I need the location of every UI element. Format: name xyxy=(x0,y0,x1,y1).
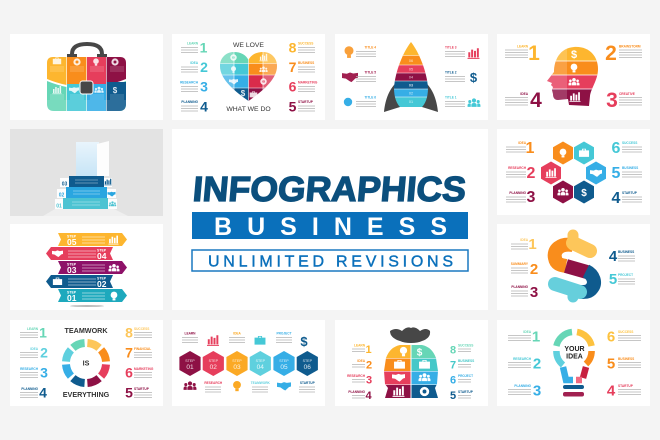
bag right labels: BUSINESS xyxy=(458,359,474,363)
timeline hexagons: STEP xyxy=(303,359,313,363)
step 05 arrow: STEP xyxy=(67,234,77,238)
rocket step numbers: 05 xyxy=(409,68,413,72)
right labels: SUCCESS xyxy=(298,42,313,46)
hexagon left labels: 2 xyxy=(527,165,536,182)
teamwork left labels xyxy=(20,324,48,400)
bulb right labels: 5 xyxy=(607,356,615,372)
rocket right labels: TITLE 3 xyxy=(445,46,457,50)
bag left labels xyxy=(347,344,372,402)
timeline hexagons: STEP xyxy=(279,359,289,363)
step 01 arrow: STEP xyxy=(67,290,77,294)
rocket step numbers: 06 xyxy=(409,59,413,63)
bulb right labels: 6 xyxy=(607,328,615,346)
left labels xyxy=(180,40,208,114)
head shape xyxy=(547,46,598,106)
rocket right labels: TITLE 1 xyxy=(445,96,457,100)
bag left labels: 2 xyxy=(366,360,372,372)
timeline hexagons: STEP xyxy=(185,359,195,363)
hexagon left labels: 3 xyxy=(527,189,536,206)
head labels: IDEA xyxy=(520,92,529,96)
briefcase top row xyxy=(47,57,126,111)
timeline hexagons: STEP xyxy=(256,359,266,363)
panel: light bulb: IDEA xyxy=(566,354,583,360)
timeline bottom row xyxy=(184,381,316,392)
rocket step numbers xyxy=(409,59,413,104)
hexagon left labels xyxy=(506,140,536,206)
bag right labels: 8 xyxy=(450,344,456,356)
bag left labels: 1 xyxy=(365,344,372,356)
rocket body xyxy=(394,42,428,107)
bag right labels: 5 xyxy=(450,390,456,402)
timeline bottom row: STARTUP xyxy=(300,381,316,385)
bulb left labels: RESEARCH xyxy=(513,357,532,361)
rocket right labels: $ xyxy=(470,70,478,85)
floor xyxy=(43,209,128,216)
timeline top row: PROJECT xyxy=(276,332,292,336)
rocket right labels xyxy=(445,46,480,107)
right labels xyxy=(289,40,318,114)
dollar left labels: PLANNING xyxy=(511,285,529,289)
heart chart xyxy=(220,50,278,102)
rocket left labels: TITLE 4 xyxy=(364,46,376,50)
dollar left labels: 1 xyxy=(528,236,537,253)
bulb left labels xyxy=(508,328,541,400)
bag right labels: STARTUP xyxy=(458,390,474,394)
bulb right labels: STARTUP xyxy=(618,384,634,388)
title: infographics: INFOGRAPHICS xyxy=(191,170,468,209)
dollar left labels: 2 xyxy=(530,261,538,278)
rocket left labels: TITLE 5 xyxy=(364,70,376,74)
step 01 arrow xyxy=(58,289,127,303)
stair side blocks: 01 xyxy=(56,204,62,210)
panel: money bag xyxy=(335,320,488,406)
bulb outline segments xyxy=(556,332,592,380)
step 03 arrow: 03 xyxy=(67,265,77,275)
bulb center text: YOUR xyxy=(564,346,585,353)
bag right labels xyxy=(450,344,474,402)
teamwork right labels: MARKETING xyxy=(134,367,154,371)
bag icons: $ xyxy=(417,348,423,358)
step 01 arrow: 01 xyxy=(67,293,77,303)
bulb right labels xyxy=(607,328,641,400)
dollar right labels: BUSINESS xyxy=(618,250,634,254)
dollar left labels xyxy=(511,236,538,301)
bulb right labels: 4 xyxy=(607,382,616,400)
rocket right labels: TITLE 2 xyxy=(445,70,457,74)
rocket step numbers: 01 xyxy=(409,100,413,104)
bag icons xyxy=(392,347,430,397)
banner: unlimited revisions: UNLIMITED REVISIONS xyxy=(208,254,453,270)
teamwork left labels: 3 xyxy=(40,364,48,380)
head labels: 2 xyxy=(605,42,617,65)
step 04 arrow: 04 xyxy=(97,251,107,261)
heading: what we do: WHAT WE DO xyxy=(226,106,271,113)
timeline hexagons: STEP xyxy=(232,359,242,363)
head labels: 4 xyxy=(530,89,542,112)
dollar left labels: IDEA xyxy=(520,238,529,242)
bag left labels: RESEARCH xyxy=(347,374,366,378)
timeline top row: IDEA xyxy=(233,332,242,336)
dollar right labels: 4 xyxy=(609,248,618,265)
bulb left labels: 2 xyxy=(533,356,541,372)
banner: business: BUSINESS xyxy=(214,213,447,241)
teamwork left labels: 1 xyxy=(39,324,47,340)
head labels: 1 xyxy=(528,42,540,65)
dollar left labels: 3 xyxy=(530,284,538,301)
teamwork right labels: 5 xyxy=(125,384,133,400)
panel: hexagon timeline xyxy=(172,320,325,406)
head labels: 3 xyxy=(606,89,618,112)
left labels: 4 xyxy=(200,98,208,114)
rocket left labels: TITLE 6 xyxy=(364,96,376,100)
step 03 arrow xyxy=(58,261,127,275)
head labels: LEARN xyxy=(517,44,529,48)
heading: everything: EVERYTHING xyxy=(63,390,110,399)
right labels: 5 xyxy=(289,98,297,114)
hexagon right labels: STARTUP xyxy=(622,191,638,195)
timeline hexagons: 05 xyxy=(280,364,288,371)
panel: hexagon cycle xyxy=(497,129,650,215)
timeline hexagons: 06 xyxy=(304,364,311,371)
timeline hexagons: STEP xyxy=(209,359,219,363)
teamwork left labels: 4 xyxy=(39,384,47,400)
bag neck xyxy=(390,327,430,343)
head labels: BRAINSTORM xyxy=(619,44,641,48)
heart icons xyxy=(229,54,268,98)
hexagon right labels xyxy=(612,140,642,207)
teamwork right labels: 6 xyxy=(125,364,133,380)
hexagon right labels: 4 xyxy=(612,190,621,207)
step 02 arrow: 02 xyxy=(97,279,107,289)
stair side blocks: 03 xyxy=(62,182,67,188)
left labels: 3 xyxy=(200,78,208,94)
teamwork right labels: SUCCESS xyxy=(134,327,149,331)
bulb right labels: BUSINESS xyxy=(618,357,634,361)
timeline top row: $ xyxy=(300,334,308,349)
briefcase handle xyxy=(67,44,107,57)
step 05 arrow xyxy=(58,233,127,247)
rocket left labels xyxy=(342,46,376,106)
left labels: RESEARCH xyxy=(180,80,199,84)
timeline top row: LEARN xyxy=(185,332,196,336)
heart icons: $ xyxy=(241,89,246,98)
bulb left labels: PLANNING xyxy=(514,384,532,388)
left labels: LEARN xyxy=(187,42,199,46)
panel: briefcase infographic xyxy=(10,34,163,120)
teamwork left labels: PLANNING xyxy=(21,387,39,391)
bag left labels: IDEA xyxy=(357,359,366,363)
teamwork right labels: 7 xyxy=(125,344,133,360)
head labels: CREATIVE xyxy=(619,92,635,96)
teamwork right labels: STARTUP xyxy=(134,387,150,391)
briefcase icons: $ xyxy=(113,86,118,95)
teamwork left labels: 2 xyxy=(40,344,48,360)
bag right labels: SUCCESS xyxy=(458,344,473,348)
bag body xyxy=(384,345,438,398)
head icons: $ xyxy=(571,49,577,61)
open door xyxy=(76,141,109,177)
rocket step numbers: 02 xyxy=(409,92,413,96)
panel: head infographic xyxy=(497,34,650,120)
right labels: 6 xyxy=(289,78,297,94)
ring center text: IS xyxy=(83,358,90,368)
step 04 arrow xyxy=(46,247,113,261)
timeline hexagons: 04 xyxy=(257,364,264,371)
head labels xyxy=(505,42,642,112)
ring chart xyxy=(66,343,106,383)
step 05 arrow: 05 xyxy=(67,237,77,247)
dollar left labels: SUMMIARY xyxy=(511,262,529,266)
hexagon left labels: IDEA xyxy=(518,141,527,145)
panel: central title xyxy=(172,129,488,310)
dollar sign puzzle xyxy=(555,235,594,297)
briefcase icons xyxy=(52,58,119,95)
teamwork left labels: LEARN xyxy=(27,327,39,331)
step 03 arrow: STEP xyxy=(67,262,77,266)
bulb left labels: 1 xyxy=(532,328,540,346)
timeline hexagons: 01 xyxy=(186,364,194,371)
panel: open door staircase xyxy=(10,129,163,216)
left labels: 1 xyxy=(200,40,208,56)
rocket step numbers: 03 xyxy=(409,84,413,88)
bag left labels: 3 xyxy=(366,374,372,386)
teamwork left labels: RESEARCH xyxy=(20,367,39,371)
dollar right labels xyxy=(609,248,635,288)
bag left labels: 4 xyxy=(365,390,372,402)
bag right labels: 7 xyxy=(450,360,456,372)
step 02 arrow xyxy=(46,275,113,289)
right labels: BUSINESS xyxy=(298,61,314,65)
head icons xyxy=(568,49,581,102)
teamwork right labels: FINANCIAL xyxy=(134,347,151,351)
panel: dollar puzzle xyxy=(497,224,650,310)
hexagon right labels: BUSINESS xyxy=(622,166,638,170)
hexagons: $ xyxy=(581,188,587,199)
left labels: PLANNING xyxy=(181,100,199,104)
timeline bottom row: TEAMWORK xyxy=(251,381,271,385)
teamwork left labels: IDEA xyxy=(30,347,39,351)
left labels: IDEA xyxy=(190,61,199,65)
right labels: STARTUP xyxy=(298,100,314,104)
timeline top row xyxy=(182,332,308,349)
rocket fins xyxy=(384,82,438,112)
heading: teamwork: TEAMWORK xyxy=(64,326,108,335)
step 04 arrow: STEP xyxy=(97,248,107,252)
bag left labels: PLANNING xyxy=(348,390,366,394)
timeline hexagons xyxy=(179,351,318,376)
hexagon right labels: 5 xyxy=(612,165,621,182)
panel: rocket infographic xyxy=(335,34,488,120)
panel: heart infographic xyxy=(172,34,325,120)
timeline hexagons: 03 xyxy=(233,364,241,371)
left labels: 2 xyxy=(200,59,208,75)
panel: arrow steps xyxy=(10,224,163,310)
right labels: 7 xyxy=(289,59,297,75)
timeline hexagons: 02 xyxy=(210,364,217,371)
right labels: MARKETING xyxy=(298,80,318,84)
bag right labels: PROJECT xyxy=(458,374,473,378)
stair side blocks xyxy=(55,178,117,210)
hexagon right labels: SUCCESS xyxy=(622,141,637,145)
step 02 arrow: STEP xyxy=(97,276,107,280)
right labels: 8 xyxy=(289,40,297,56)
bag left labels: LEARN xyxy=(354,344,366,348)
stair side blocks: 02 xyxy=(59,192,64,198)
bulb left labels: IDEA xyxy=(523,330,532,334)
heading: we love: WE LOVE xyxy=(233,42,264,49)
dollar right labels: PROJECT xyxy=(618,273,633,277)
hexagon left labels: RESEARCH xyxy=(508,166,527,170)
briefcase clasp xyxy=(80,81,93,94)
dollar right labels: 5 xyxy=(609,271,617,288)
arrow shadow xyxy=(70,305,104,307)
hexagon left labels: 1 xyxy=(526,140,535,157)
stairs xyxy=(63,176,108,209)
bag right labels: 6 xyxy=(450,374,456,386)
bulb left labels: 3 xyxy=(533,382,541,400)
teamwork right labels xyxy=(125,324,154,400)
hexagon left labels: PLANNING xyxy=(509,191,527,195)
hexagons xyxy=(541,142,606,204)
rocket step numbers: 04 xyxy=(409,76,413,80)
bulb base xyxy=(563,385,584,389)
hexagon right labels: 6 xyxy=(612,140,621,157)
panel: teamwork ring xyxy=(10,320,163,406)
panel: light bulb xyxy=(497,320,650,406)
teamwork right labels: 8 xyxy=(125,324,133,340)
timeline bottom row: RESEARCH xyxy=(204,381,223,385)
bulb right labels: SUCCESS xyxy=(618,330,633,334)
